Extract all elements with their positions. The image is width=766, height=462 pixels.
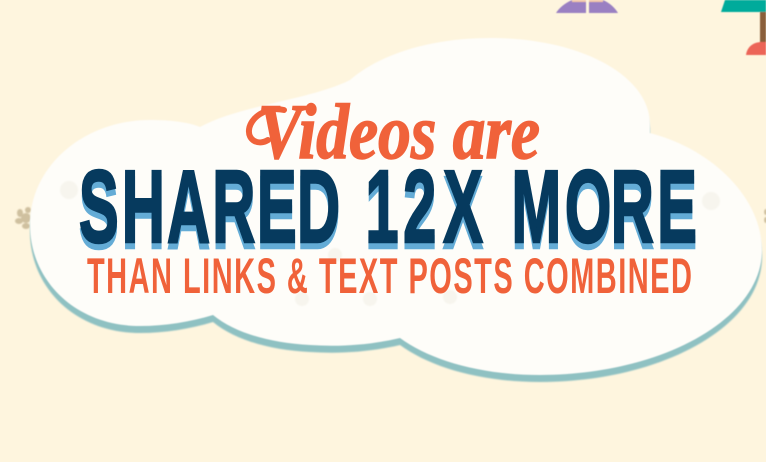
main heading: SHARED 12X MORE: SHARED 12X MORE bbox=[79, 149, 697, 264]
main heading shadow: SHARED 12X MORE: SHARED 12X MORE bbox=[79, 155, 697, 270]
icon: paw print left bbox=[15, 207, 31, 229]
cloud panel bbox=[30, 38, 762, 375]
faint paw prints on cloud bbox=[60, 181, 720, 306]
icon: paw print right bbox=[764, 209, 766, 223]
cloud shadow bbox=[30, 45, 762, 382]
icon: tree fragment bbox=[721, 0, 766, 55]
icon: purple figure fragment bbox=[556, 0, 618, 13]
script heading: Videos are: Videos are bbox=[258, 88, 540, 175]
subheading: than links and text posts combined: THAN LINKS & TEXT POSTS COMBINED bbox=[87, 248, 692, 304]
